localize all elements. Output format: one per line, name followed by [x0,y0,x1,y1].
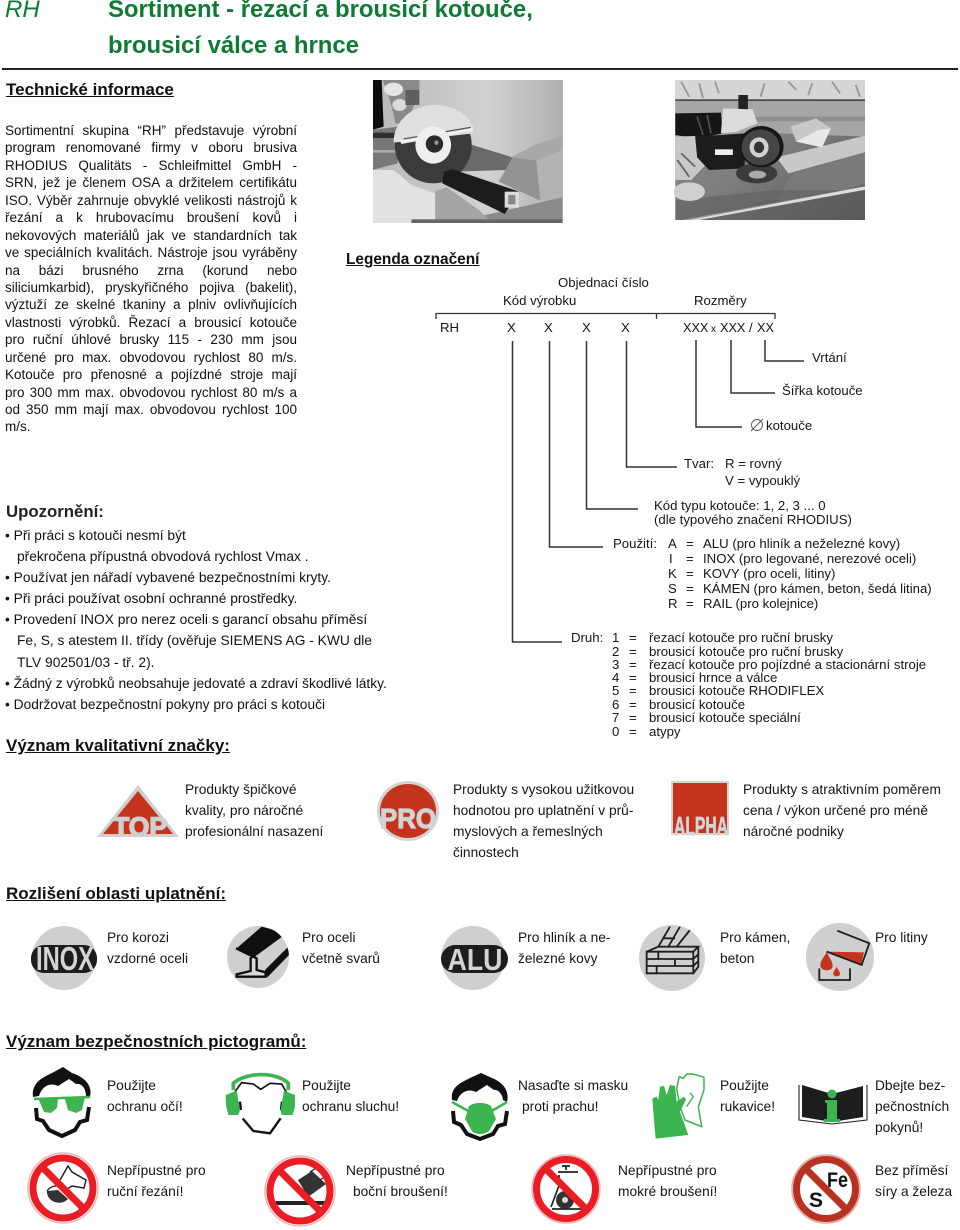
icon: ALPHA: ALPHA [674,811,728,841]
text: hand cutting: ruční řezání! [107,1184,183,1199]
text: gloves [720,1078,775,1114]
icon: gloves [652,1074,704,1139]
list: Druh: atypy [649,724,681,739]
list: Druh: 4 [612,670,619,685]
list: Použití [613,536,932,611]
text: TOP description: kvality, pro náročné [185,803,304,818]
order code row: / [749,320,753,335]
list: Druh: = [629,670,637,685]
list: Druh: brousicí kotouče RHODIFLEX [649,683,824,698]
order code row: X [621,320,630,335]
text: INOX description [107,930,188,966]
text: sulfur and iron: Bez příměsí [875,1163,949,1178]
label: Kód typu kotouče: (dle typového značení RHODIUS) [654,512,852,527]
text: TOP description: profesionální nasazení [185,824,324,839]
list: Použití: = [686,581,694,596]
label: Tvar: Tvar: [684,456,714,471]
icon: no side grinding [265,1156,335,1226]
text block: technical information: vlastnosti výrobků. Řezací a brousicí kotouče [5,315,297,330]
text block: technical information: ISO. Výběr zahrnuje obvyklé velikosti nástrojů k [5,193,297,208]
label: Šířka kotouče: Šířka kotouče [782,383,863,398]
icon: INOX: INOX [36,940,94,977]
text: PRO description: činnostech [453,845,519,860]
list: Použití: K [668,566,677,581]
list: Druh: = [629,630,637,645]
text block: technical information: SRN, jež je členem OSA a držitelem certifikátu [5,175,297,190]
text block: warnings list: • Používat jen nářadí vybavené bezpečnostními kryty. [5,570,331,585]
legend diagram [436,275,932,739]
text: brick description: Pro kámen, [720,930,790,945]
text: INOX description: Pro korozi [107,930,169,945]
order code row: X [544,320,553,335]
text: hearing protection: Použijte [302,1078,351,1093]
icon: dust mask [452,1073,508,1139]
text: ALU description: železné kovy [518,951,598,966]
text: safety instructions: pokynů! [875,1120,923,1135]
heading: Legenda označení: Legenda označení [346,251,479,268]
text: hand cutting [107,1163,206,1199]
list: Druh: 6 [612,697,619,712]
text block: technical information: od 350 mm mají max. obvodovou rychlost 100 [5,402,297,417]
text: PRO description: myslových a řemeslných [453,824,603,839]
diagram header: Objednací číslo: Objednací číslo [558,275,649,290]
list: Použití: Použití: [613,536,657,551]
icon: no sulfur and iron: S [809,1189,823,1212]
list: Použití: RAIL (pro kolejnice) [703,596,818,611]
label: Kód typu kotouče [654,498,852,527]
text: ALPHA description: náročné podniky [743,824,844,839]
list: Druh [571,630,926,739]
list: Druh: řezací kotouče pro ruční brusky [649,630,833,645]
text: side grinding: Nepřípustné pro [346,1163,445,1178]
photo: angle grinder in use [673,80,867,220]
order code row [440,320,774,335]
text block: warnings list: • Při práci s kotouči nesmí být [5,528,186,543]
text: side grinding [346,1163,448,1199]
text: dust mask: Nasaďte si masku [518,1078,628,1093]
heading: Význam kvalitativní značky: Význam kvalitativní značky: [6,736,230,755]
text: hand cutting: Nepřípustné pro [107,1163,206,1178]
list: Druh: = [629,644,637,659]
list: Druh: Druh: [571,630,603,645]
text: hearing protection: ochranu sluchu! [302,1099,399,1114]
text block: technical information: program renomované firmy v oboru brusiva [5,140,297,155]
text: TOP description [185,782,324,839]
text: side grinding: boční broušení! [353,1184,448,1199]
text: safety instructions: Dbejte bez- [875,1078,945,1093]
heading: Význam bezpečnostních pictogramů: Význam bezpečnostních pictogramů: [6,1032,306,1051]
heading: Rozlišení oblasti uplatnění: Rozlišení oblasti uplatnění: [6,884,226,903]
text block: technical information: určené pro max. obvodovou rychlost 80 m/s. [5,350,297,365]
icon: no sulfur and iron: Fe [827,1169,848,1192]
list: Druh: brousicí hrnce a válce [649,670,777,685]
text block: technical information: nekovových materiálů jak ve standardních tak [5,228,297,243]
list: Použití: ALU (pro hliník a neželezné kovy) [703,536,900,551]
header rule [2,68,958,70]
text: brick description [720,930,790,966]
text: ALPHA description [743,782,941,839]
text: dust mask [518,1078,628,1114]
list: Použití: INOX (pro legované, nerezové oceli) [703,551,916,566]
icon: TOP [97,785,179,842]
text: PRO description [453,782,634,860]
icon: no wet grinding [532,1155,600,1223]
text: eye protection: Použijte [107,1078,156,1093]
text: gloves: Použijte [720,1078,769,1093]
text: ALU description [518,930,610,966]
text: gloves: rukavice! [720,1099,775,1114]
text: PRO description: hodnotou pro uplatnění v prů- [453,803,633,818]
list: Použití: = [686,566,694,581]
text: ALU description: Pro hliník a ne- [518,930,610,945]
text: sulfur and iron: síry a železa [875,1184,953,1199]
list: Použití: R [668,596,678,611]
heading: Upozornění: Upozornění: [6,502,104,521]
list: Druh: brousicí kotouče pro ruční brusky [649,644,844,659]
icon: steel beam [227,926,292,988]
order code row: X [582,320,591,335]
label: Kód typu kotouče: Kód typu kotouče: 1, 2, 3 ... 0 [654,498,826,513]
text block: warnings list: Fe, S, s atestem II. třídy (ověřuje SIEMENS AG - KWU dle [17,633,372,648]
text: hearing protection [302,1078,399,1114]
list: Druh: = [629,697,637,712]
text block: warnings list: • Při práci používat osobní ochranné prostředky. [5,591,297,606]
text block: warnings list: • Dodržovat bezpečnostní pokyny pro práci s kotouči [5,697,325,712]
icon: TOP: TOP [113,812,167,842]
order code row: XX [757,321,774,335]
label: Tvar: R = rovný [725,456,782,471]
icon: ALPHA [671,781,729,841]
list: Druh: = [629,657,637,672]
list: Použití: I [669,551,673,566]
icon: hearing protection [226,1075,295,1133]
label: Tvar: V = vypouklý [725,473,801,488]
list: Druh: 2 [612,644,619,659]
order code row: XXX [683,321,709,335]
text block: technical information: siliciumkarbid), pryskyřičného pojiva (bakelit), [5,280,297,295]
text: sulfur and iron [875,1163,953,1199]
text block: warnings list [5,528,387,712]
text: eye protection: ochranu očí! [107,1099,183,1114]
icon: PRO [377,781,439,841]
text block: technical information: pro ruční úhlové brusky 115 - 230 mm jsou [5,332,297,347]
icon: no hand cutting [28,1153,98,1223]
text: safety instructions: pečnostních [875,1099,949,1114]
photo: cut-off machine [372,80,563,223]
icon: INOX [31,926,97,990]
list: Druh: = [629,710,637,725]
text: wet grinding: Nepřípustné pro [618,1163,717,1178]
text: TOP description: Produkty špičkové [185,782,297,797]
list: Druh: brousicí kotouče speciální [649,710,801,725]
list: Druh: 5 [612,683,619,698]
text block: technical information [5,123,297,434]
list: Druh: 0 [612,724,619,739]
text block: technical information: RHODIUS Qualitäts - Schleifmittel GmbH - [5,158,297,173]
text block: technical information: m/s. [5,419,30,434]
icon: ALU [441,926,508,990]
text block: warnings list: • Provedení INOX pro nerez oceli s garancí obsahu příměsí [5,612,367,627]
icon: ALU: ALU [448,942,502,977]
list: Druh: řezací kotouče pro pojízdné a stacionární stroje [649,657,926,672]
text block: technical information: na bázi brusného zrna (korund nebo [5,262,297,278]
order code row: XXX [720,321,746,335]
list: Druh: 1 [612,630,619,645]
text block: technical information: Kotouče pro přenosné a pojízdné stroje mají [5,367,297,382]
title: brousicí válce a hrnce [108,32,359,59]
list: Druh: 7 [612,710,619,725]
text block: warnings list: překročena přípustná obvodová rychlost Vmax . [17,549,309,564]
text: PRO description: Produkty s vysokou užitkovou [453,782,634,797]
list: Druh: = [629,724,637,739]
label: průměr kotouče: kotouče [766,418,812,433]
list: Použití: S [668,581,677,596]
text: steel description: Pro oceli [302,930,356,945]
label: Vrtání: Vrtání [812,350,847,365]
list: Použití: KÁMEN (pro kámen, beton, šedá litina) [703,581,932,596]
icon: PRO: PRO [380,803,436,834]
text: wet grinding [618,1163,717,1199]
list: Druh: 3 [612,657,619,672]
text block: warnings list: TLV 902501/03 - tř. 2). [17,655,154,670]
list: Použití: = [686,536,694,551]
order code row: RH [440,320,459,335]
list: Druh: brousicí kotouče [649,697,745,712]
text: cast iron description: Pro litiny [875,930,928,945]
list: Použití: = [686,596,694,611]
text: INOX description: vzdorné oceli [107,951,188,966]
title [108,0,533,59]
icon: cast iron [806,923,874,991]
icon: brick wall [639,925,705,991]
icon: safety book [799,1085,867,1124]
text block: warnings list: • Žádný z výrobků neobsahuje jedovaté a zdraví škodlivé látky. [5,676,387,691]
text: steel description: včetně svarů [302,951,380,966]
order code row: x [711,324,716,335]
text: eye protection [107,1078,183,1114]
order code row: X [507,320,516,335]
heading: Technické informace: Technické informace [6,80,174,99]
label: Tvar [684,456,801,488]
text: dust mask: proti prachu! [522,1099,598,1114]
list: Druh: = [629,683,637,698]
icon: eye protection [33,1067,91,1136]
text: ALPHA description: cena / výkon určené pro méně [743,803,928,818]
bracket [436,314,775,319]
text block: technical information: výztuží ze skelné tkaniny a plniv ovlivňujících [5,297,297,312]
text block: technical information: řezání a k hrubovacímu broušení kovů i [5,210,297,225]
diagram header: Rozměry: Rozměry [694,293,747,308]
text: steel description [302,930,380,966]
list: Použití: = [686,551,694,566]
text block: technical information: ve speciálních kvalitách. Nástroje jsou vyráběny [5,245,297,260]
text block: technical information: Sortimentní skupina “RH” představuje výrobní [5,123,297,138]
text: wet grinding: mokré broušení! [618,1184,717,1199]
list: Použití: A [668,536,677,551]
text block: technical information: pro 300 mm max. obvodovou rychlost 80 m/s a [5,385,297,400]
icon: no sulfur and iron [792,1155,860,1223]
diagram header: Kód výrobku: Kód výrobku [503,293,576,308]
list: Použití: KOVY (pro oceli, litiny) [703,566,835,581]
connector lines [512,340,804,642]
text: safety instructions [875,1078,949,1135]
text: ALPHA description: Produkty s atraktivním poměrem [743,782,941,797]
text: brick description: beton [720,951,754,966]
